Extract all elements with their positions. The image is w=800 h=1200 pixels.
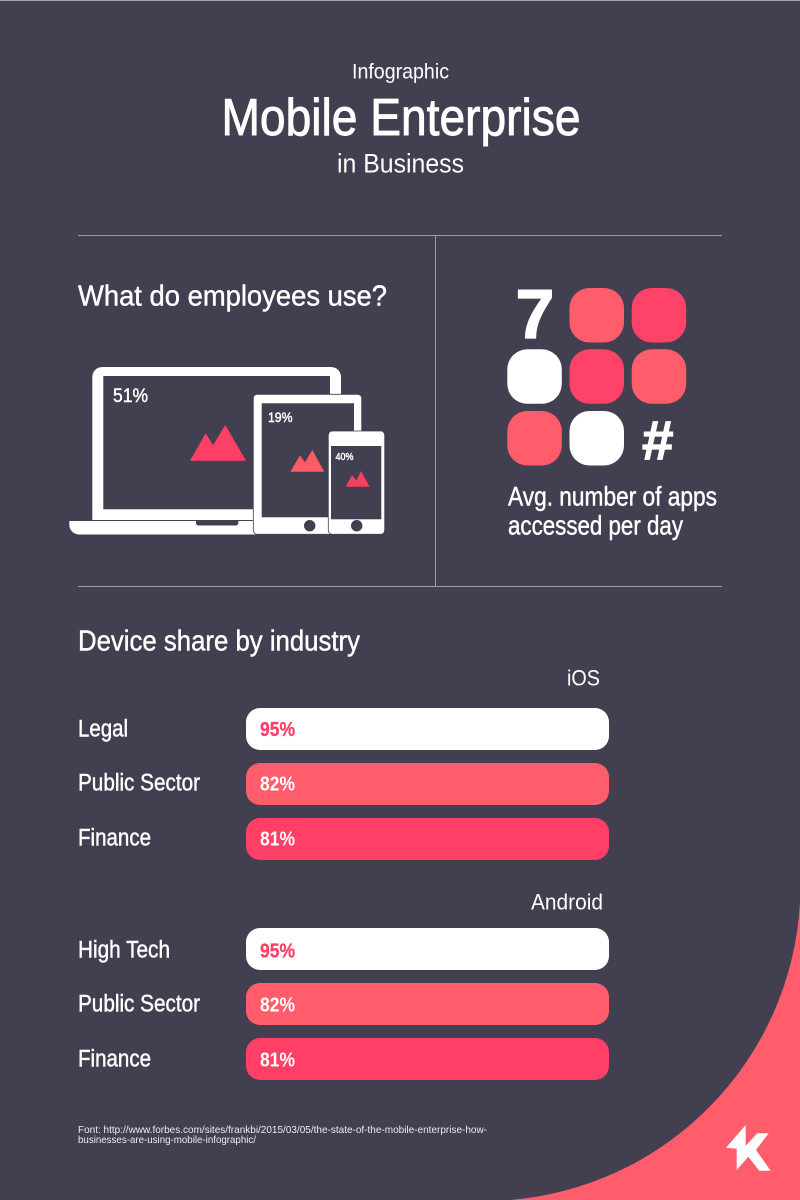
heading: device share: Device share by industry: [78, 626, 360, 658]
row: finance android: Finance: [78, 1046, 151, 1072]
column label: android: Android: [531, 890, 603, 914]
column label: iOS: iOS: [567, 666, 600, 690]
source footnote: businesses-are-using-mobile-infographic/: [78, 1134, 256, 1146]
symbol: hash: #: [642, 409, 674, 471]
icon: tablet 19%: 19%: [268, 409, 292, 425]
row: public sector ios: 82%: [260, 774, 295, 796]
row: finance android: [78, 1038, 609, 1080]
row: legal: [78, 708, 609, 750]
caption: avg apps: Avg. number of apps: [508, 482, 717, 512]
panel: device share by industry: [78, 626, 609, 1080]
panel: average apps per day: [507, 275, 717, 540]
title block: [222, 60, 580, 178]
title: kicker: Infographic: [352, 60, 449, 84]
title: main heading: Mobile Enterprise: [222, 89, 580, 147]
heading: what do employees use: What do employees use?: [78, 280, 387, 312]
icon: K logo: [726, 1125, 771, 1171]
corner accent curve: [510, 903, 800, 1200]
icon: phone 40%: 40%: [336, 451, 354, 463]
icon: laptop 51%: [69, 367, 341, 534]
row: finance ios: Finance: [78, 824, 151, 852]
icon: laptop 51%: 51%: [113, 385, 148, 407]
row: legal: 95%: [260, 719, 295, 741]
number: 7: 7: [516, 275, 554, 353]
row: finance ios: [78, 818, 609, 860]
row: legal: Legal: [78, 716, 128, 742]
icon: app grid: [507, 288, 686, 466]
row: public sector android: Public Sector: [78, 990, 200, 1018]
source footnote: Font: http://www.forbes.com/sites/frankbi/2015/03/05/the-state-of-the-mobile-enterprise-how-: [78, 1124, 487, 1136]
row: high tech: [78, 928, 609, 970]
title: subtitle: in Business: [337, 148, 464, 178]
panel: what do employees use: [69, 280, 387, 534]
row: finance android: 81%: [260, 1050, 295, 1072]
row: finance ios: 81%: [260, 828, 295, 850]
row: high tech: 95%: [260, 940, 295, 962]
row: public sector ios: [78, 763, 609, 805]
row: public sector android: 82%: [260, 994, 295, 1016]
row: high tech: High Tech: [78, 936, 170, 964]
icon: phone 40%: [328, 431, 385, 534]
row: public sector ios: Public Sector: [78, 770, 200, 796]
caption: avg apps: accessed per day: [508, 510, 684, 540]
row: public sector android: [78, 983, 609, 1025]
icon: tablet 19%: [253, 394, 362, 534]
